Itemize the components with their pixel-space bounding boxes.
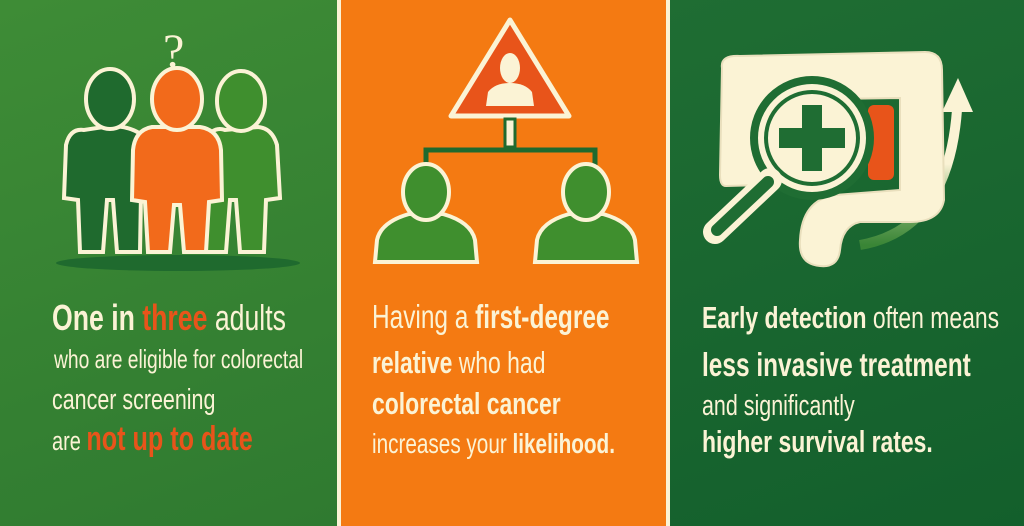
icon: colon with magnifier and arrow: [703, 51, 973, 268]
text block: early detection: and significantly: [702, 390, 855, 422]
text block: family history: relative who had: [372, 345, 545, 380]
colon shape: [720, 52, 944, 266]
text block: early detection: [702, 300, 999, 459]
text block: screening: cancer screening: [52, 384, 215, 416]
icon: three people with question mark: ?: [163, 25, 184, 78]
text block: screening: who are eligible for colorectal: [54, 344, 303, 374]
panel: screening: [0, 0, 337, 526]
panel: family history: [341, 0, 666, 526]
icon: three people with question mark: [56, 25, 300, 271]
text block: early detection: less invasive treatment: [702, 346, 971, 383]
text block: family history: increases your likelihood.: [372, 428, 615, 459]
text block: early detection: Early detection often means: [702, 300, 999, 335]
text block: family history: [372, 298, 615, 459]
icon: warning triangle family tree: [372, 18, 640, 264]
text block: screening: One in three adults: [52, 297, 286, 338]
text block: screening: [52, 297, 303, 458]
text block: family history: Having a first-degree: [372, 298, 610, 335]
panel: early detection: [670, 0, 1024, 526]
text block: family history: colorectal cancer: [372, 386, 561, 421]
text block: early detection: higher survival rates.: [702, 424, 933, 459]
text block: screening: are not up to date: [52, 420, 253, 458]
